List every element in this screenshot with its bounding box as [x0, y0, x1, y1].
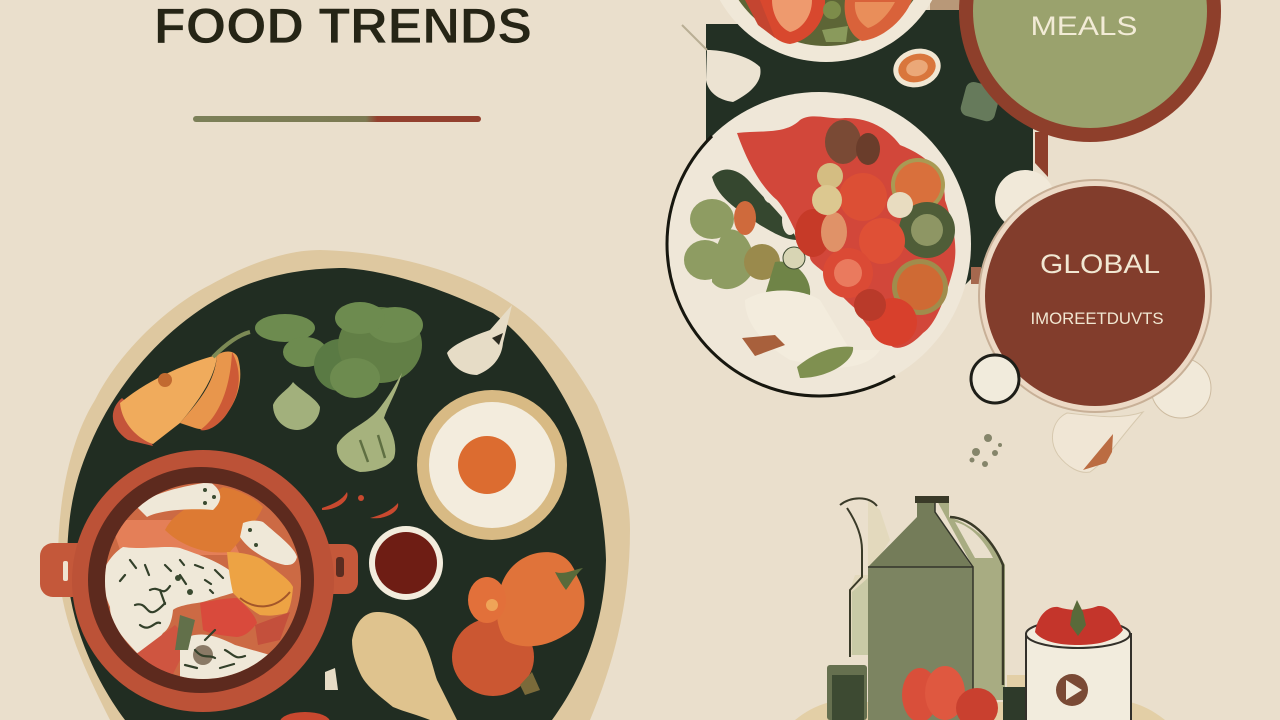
- circle: global: [979, 180, 1211, 412]
- tomato cup: [1026, 600, 1131, 720]
- icon: sauce cup: [369, 526, 443, 600]
- decorative cream blobs: [995, 170, 1211, 418]
- icon: garlic clove: [447, 305, 512, 375]
- circle: meals: MEALS: [1030, 11, 1138, 41]
- small spice mark: [325, 668, 338, 690]
- icon: herb leaves: [255, 302, 423, 398]
- scattered seeds: [970, 434, 1002, 467]
- circle: global: IMOREETDUVTS: [1030, 309, 1164, 328]
- bottom right table: [795, 702, 1165, 720]
- small accent behind global circle: [971, 267, 981, 284]
- icon: green jar: [959, 80, 1002, 123]
- panel: large round table: [58, 250, 630, 720]
- icon: chili pieces: [322, 492, 398, 518]
- icon: small orange slice: [889, 43, 945, 93]
- icon: garlic top: [682, 25, 761, 102]
- bottom tomato: [280, 712, 330, 720]
- pot: [40, 450, 358, 712]
- tomatoes and vegetables: [737, 116, 955, 348]
- icon: egg plate: [417, 390, 567, 540]
- icon: orange squash: [113, 332, 250, 446]
- small ring: [971, 355, 1019, 403]
- icon: garlic lower: [1052, 412, 1143, 472]
- plate: top bowl: [704, 0, 948, 62]
- large plate: [667, 92, 971, 396]
- circle: meals: [959, 0, 1221, 142]
- icon: green fig: [337, 373, 402, 472]
- icon: wooden spoon: [352, 612, 457, 720]
- dark base: [1003, 687, 1027, 720]
- table top strip: [930, 0, 962, 10]
- icon: orange tomatoes: [452, 552, 584, 696]
- salad greens: [684, 170, 810, 305]
- panel: top right dark table: [706, 10, 1033, 300]
- tan base piece: [1007, 675, 1025, 687]
- white vegetables: [742, 291, 880, 378]
- table accent edge: [1035, 132, 1048, 177]
- circle: global: GLOBAL: [1040, 249, 1160, 279]
- pot food: [102, 482, 297, 680]
- title underline: [193, 116, 481, 122]
- red tomatoes bottom: [902, 666, 998, 720]
- green bottle and jug: [827, 496, 1005, 720]
- icon: small green onion: [273, 382, 320, 430]
